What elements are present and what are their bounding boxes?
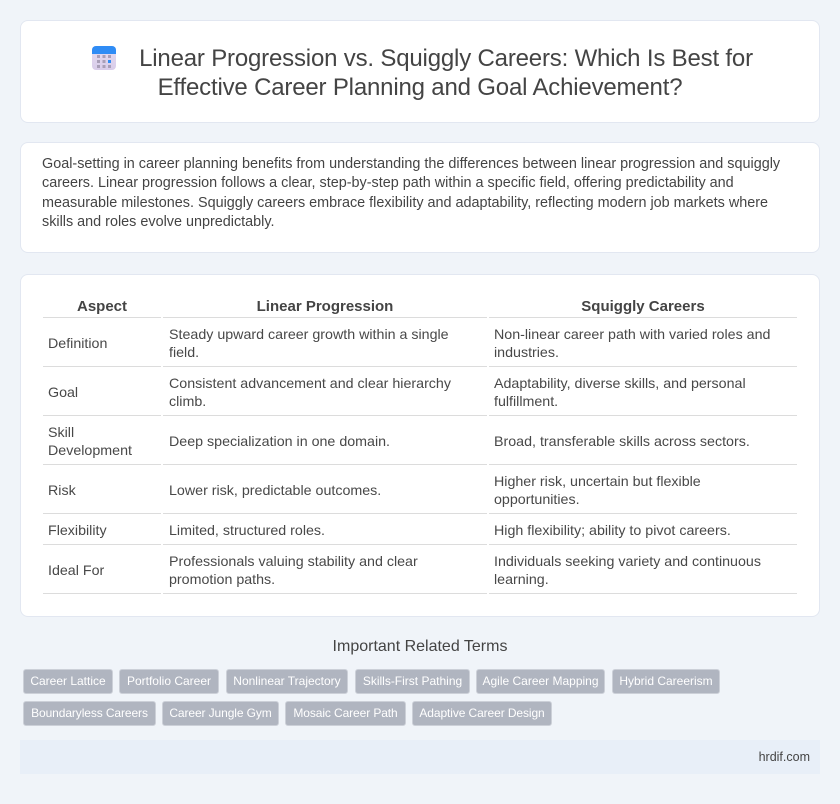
tag: skills-first pathing [355,669,470,694]
ideal for: squiggly [494,554,761,588]
table header: linear progression: Linear Progression [257,298,393,315]
comparison table panel [20,274,820,617]
row: risk: Risk [48,483,76,499]
ideal for: linear: Professionals valuing stability and clear [169,554,418,570]
tag: skills-first pathing: Skills-First Pathing [363,674,462,688]
goal: linear: climb. [169,394,206,410]
risk: linear: Lower risk, predictable outcomes. [169,483,381,499]
goal: squiggly: fulfillment. [494,394,558,410]
risk: squiggly: Higher risk, uncertain but flexible [494,474,701,490]
definition: squiggly [494,327,770,361]
tag: hybrid careerism [612,669,720,694]
tag: mosaic career path [285,701,406,726]
tag: boundaryless careers [23,701,156,726]
tag: career lattice [23,669,113,694]
related terms heading: Important Related Terms [333,638,507,655]
skill development: linear: Deep specialization in one domain. [169,434,390,450]
intro panel [20,142,820,253]
row: skill development: Development [48,443,132,459]
row: flexibility: Flexibility [48,523,107,539]
footer source: hrdif.com [759,750,810,764]
ideal for: squiggly: learning. [494,572,549,588]
tag: mosaic career path: Mosaic Career Path [293,706,398,720]
tag: career jungle gym: Career Jungle Gym [169,706,272,720]
tag: agile career mapping [476,669,605,694]
ideal for: linear: promotion paths. [169,572,275,588]
icon: calendar [92,46,116,70]
title [139,45,753,101]
row: ideal for: Ideal For [48,563,104,579]
tag: boundaryless careers: Boundaryless Careers [31,706,148,720]
row: definition: Definition [48,336,107,352]
row: skill development: Skill [48,425,74,441]
goal: squiggly [494,376,746,410]
intro text: Goal-setting in career planning benefits from understanding the differences between linear progression and squiggly [42,156,780,172]
tag: portfolio career: Portfolio Career [127,674,211,688]
intro text [42,156,780,230]
goal: linear [169,376,451,410]
risk: squiggly: opportunities. [494,492,580,508]
row: skill development [48,425,132,459]
tag: hybrid careerism: Hybrid Careerism [619,674,713,688]
skill development: squiggly: Broad, transferable skills across sectors. [494,434,750,450]
table header: squiggly careers: Squiggly Careers [581,298,705,315]
tag: career jungle gym [162,701,279,726]
tag: nonlinear trajectory: Nonlinear Trajectory [233,674,341,688]
goal: linear: Consistent advancement and clear hierarchy [169,376,451,392]
tag: adaptive career design: Adaptive Career Design [419,706,545,720]
ideal for: squiggly: Individuals seeking variety and continuous [494,554,761,570]
table header: aspect: Aspect [77,298,127,315]
definition: linear: Steady upward career growth within a single [169,327,449,343]
title: Linear Progression vs. Squiggly Careers: Which Is Best for [139,45,753,72]
ideal for: linear [169,554,418,588]
goal: squiggly: Adaptability, diverse skills, and personal [494,376,746,392]
definition: linear: field. [169,345,199,361]
tag: agile career mapping: Agile Career Mapping [482,674,599,688]
tag: adaptive career design [412,701,552,726]
tag: career lattice: Career Lattice [30,674,106,688]
tag: portfolio career [119,669,219,694]
row: goal: Goal [48,385,78,401]
intro text: careers. Linear progression follows a clear, step-by-step path within a specific field, offering predictability and [42,175,734,191]
risk: squiggly [494,474,701,508]
definition: squiggly: industries. [494,345,559,361]
intro text: skills and roles evolve unpredictably. [42,214,274,230]
header panel [20,20,820,123]
flexibility: squiggly: High flexibility; ability to pivot careers. [494,523,731,539]
definition: linear [169,327,449,361]
footer bar [20,740,820,774]
definition: squiggly: Non-linear career path with varied roles and [494,327,770,343]
title: Effective Career Planning and Goal Achievement? [158,74,682,101]
tag: nonlinear trajectory [226,669,348,694]
intro text: measurable milestones. Squiggly careers embrace flexibility and adaptability, reflecting modern job markets where [42,195,768,211]
flexibility: linear: Limited, structured roles. [169,523,325,539]
